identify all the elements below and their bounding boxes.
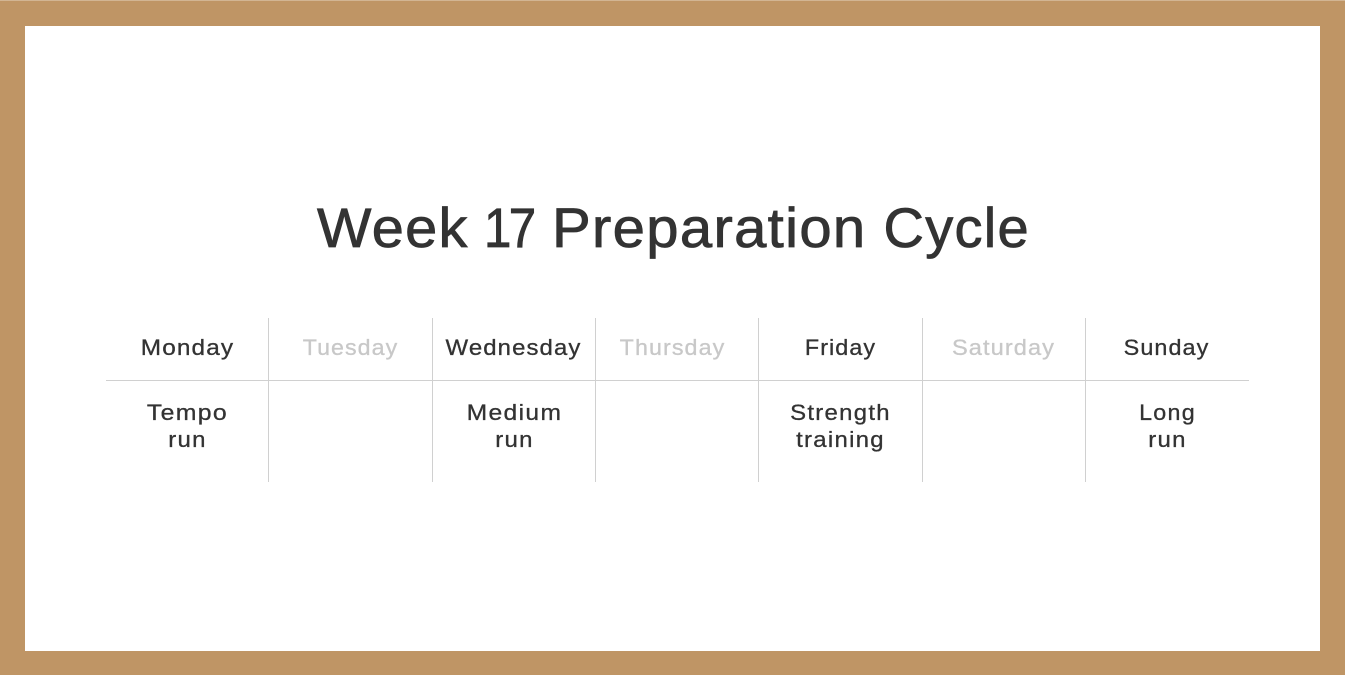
activity: Tempo run: run <box>168 426 207 452</box>
activity: Strength training <box>790 400 891 452</box>
activity: Long run: run <box>1148 426 1186 452</box>
activity: Medium run: run <box>495 426 534 452</box>
activity: Tempo run: Tempo <box>147 400 228 425</box>
activity: Long run <box>1139 400 1195 452</box>
title: 17 <box>484 196 534 259</box>
title: Cycle <box>884 196 1030 259</box>
activity: Long run: Long <box>1139 400 1195 425</box>
activity: Medium run: Medium <box>467 400 562 425</box>
day: Thursday: Thursday <box>620 335 725 360</box>
title: Preparation <box>552 196 866 259</box>
title <box>316 196 1030 259</box>
schedule table <box>106 318 1249 482</box>
activity: Medium run <box>467 400 562 452</box>
day: Friday: Friday <box>805 335 876 360</box>
activity: Strength training: training <box>796 426 885 452</box>
day: Sunday: Sunday <box>1124 335 1209 360</box>
day: Wednesday: Wednesday <box>446 335 581 360</box>
activity: Strength training: Strength <box>790 400 891 425</box>
day: Tuesday: Tuesday <box>303 335 398 360</box>
day: Monday: Monday <box>141 335 234 360</box>
title: Week <box>317 196 469 259</box>
day: Saturday: Saturday <box>952 335 1055 360</box>
activity: Tempo run <box>147 400 228 452</box>
